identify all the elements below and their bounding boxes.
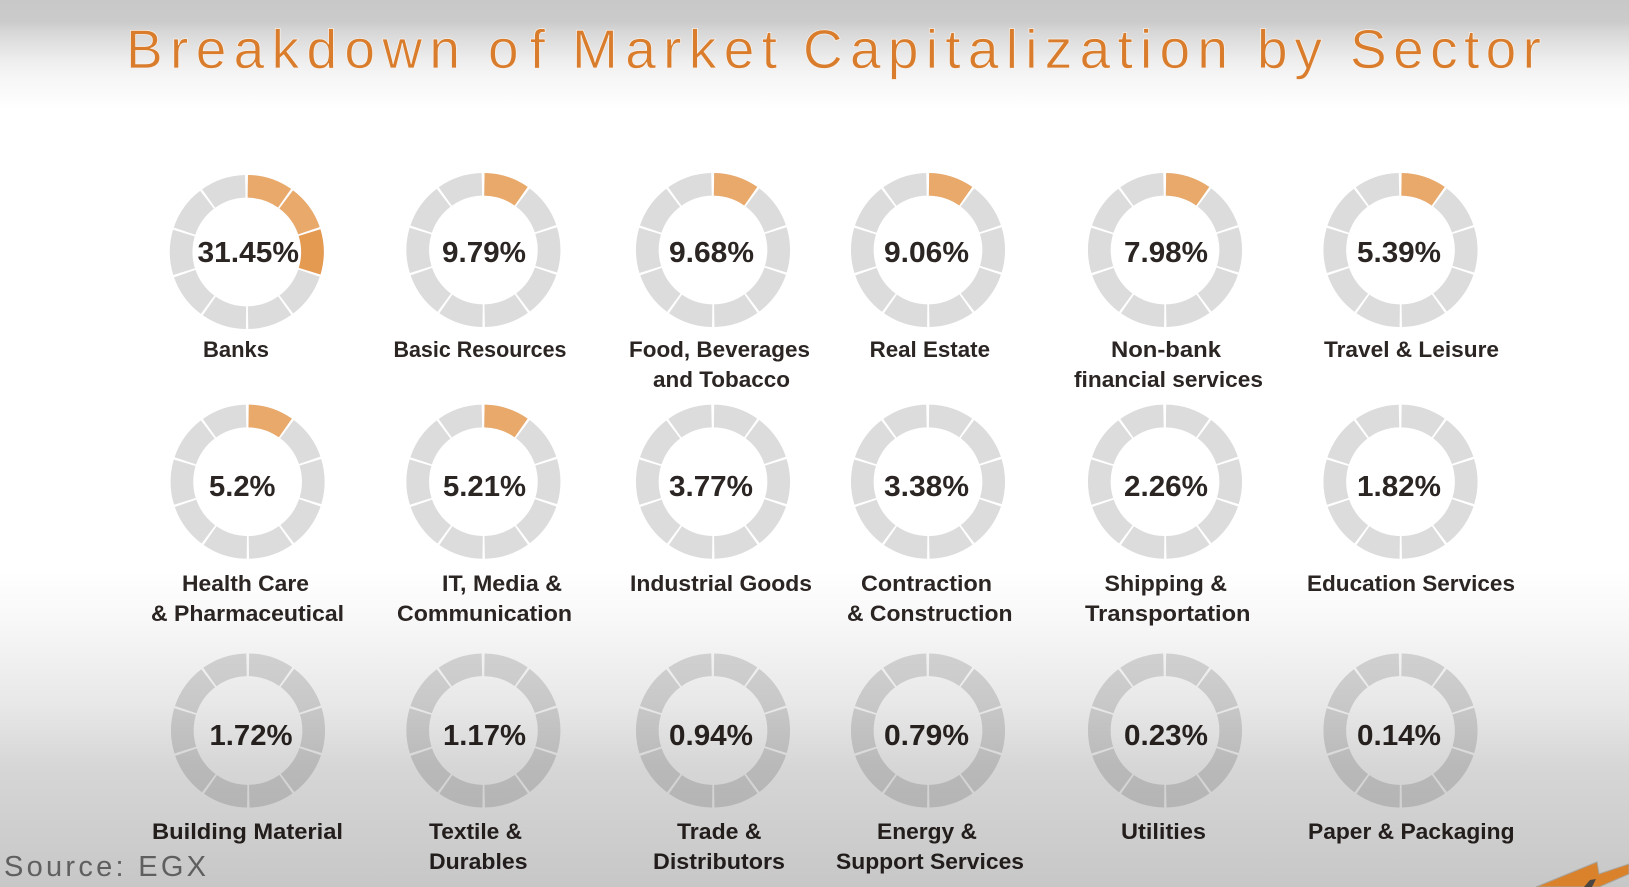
sector: Building Material [152, 665, 343, 844]
label: Basic Resources: Basic Resources [394, 337, 566, 362]
donut: Shipping & Transportation [1099, 416, 1231, 547]
value: 1.17%: 1.17% [443, 720, 526, 752]
label: Trade & Distributors: Trade & [677, 819, 762, 844]
sector: Paper & Packaging [1308, 665, 1514, 844]
label: Shipping & Transportation: Transportation [1085, 601, 1250, 626]
label: Textile & Durables: Durables [429, 849, 528, 874]
label: Education Services: Education Services [1307, 571, 1515, 596]
label: Non-bank financial services: Non-bank [1111, 337, 1222, 362]
label: Energy & Support Services: Support Services [836, 849, 1024, 874]
label: Paper & Packaging: Paper & Packaging [1308, 819, 1514, 844]
sector: Food, Beverages and Tobacco [629, 184, 810, 392]
sector: Utilities [1099, 665, 1231, 844]
donut: Contraction & Construction [862, 416, 994, 547]
sector: Real Estate [862, 184, 994, 362]
title: Market [572, 18, 777, 80]
label: Non-bank financial services [1074, 337, 1263, 392]
donut: Industrial Goods [647, 416, 779, 547]
sector: Travel & Leisure [1324, 184, 1499, 362]
label: Building Material: Building Material [152, 819, 343, 844]
sector: Non-bank financial services [1074, 184, 1263, 392]
sector: Energy & Support Services [836, 665, 1024, 874]
label: Travel & Leisure: Travel & Leisure [1324, 337, 1499, 362]
sector: Education Services [1307, 416, 1515, 596]
label: Utilities: Utilities [1121, 819, 1206, 844]
donut: Paper & Packaging [1335, 665, 1466, 796]
donut: Education Services [1335, 416, 1466, 547]
title: Sector [1350, 18, 1541, 80]
label: Contraction & Construction: & Construction [847, 601, 1012, 626]
value: 5.39%: 5.39% [1357, 237, 1441, 269]
value: 0.23%: 0.23% [1124, 720, 1208, 752]
donut: Food, Beverages and Tobacco [647, 184, 779, 316]
donut: Banks [181, 186, 312, 318]
value: 0.79%: 0.79% [884, 720, 969, 752]
label: IT, Media & Communication: IT, Media & [442, 571, 562, 596]
title: by [1257, 18, 1322, 80]
sector: IT, Media & Communication [397, 416, 572, 626]
label: IT, Media & Communication [397, 571, 572, 626]
donut: Building Material [182, 665, 314, 796]
donut: Energy & Support Services [862, 665, 994, 796]
label: Industrial Goods: Industrial Goods [630, 571, 812, 596]
value: 7.98%: 7.98% [1124, 237, 1208, 269]
title: of [488, 18, 546, 80]
value: 0.94%: 0.94% [669, 720, 753, 752]
donut: Real Estate [862, 184, 994, 316]
sector: Industrial Goods [630, 416, 812, 596]
label: Energy & Support Services [836, 819, 1024, 874]
label: IT, Media & Communication: Communication [397, 601, 572, 626]
value: 3.77%: 3.77% [669, 471, 753, 503]
sector: Basic Resources [394, 184, 566, 362]
donut: Travel & Leisure [1335, 184, 1466, 316]
value: 9.68%: 9.68% [669, 237, 754, 269]
value: 2.26%: 2.26% [1124, 471, 1208, 503]
value: 9.79%: 9.79% [442, 237, 526, 269]
value: 9.06%: 9.06% [884, 237, 969, 269]
sector: Banks [181, 186, 312, 362]
label: Contraction & Construction: Contraction [861, 571, 992, 596]
title: Breakdown [126, 18, 460, 80]
label: Contraction & Construction [847, 571, 1012, 626]
label: Energy & Support Services: Energy & [877, 819, 977, 844]
label: Health Care & Pharmaceutical [151, 571, 344, 626]
label: Trade & Distributors: Distributors [653, 849, 785, 874]
sector: Textile & Durables [418, 665, 549, 874]
sector: Contraction & Construction [847, 416, 1012, 626]
donut: Textile & Durables [418, 665, 549, 796]
label: Health Care & Pharmaceutical: & Pharmaceutical [151, 601, 344, 626]
value: 3.38%: 3.38% [884, 471, 969, 503]
donut: Trade & Distributors [647, 665, 779, 796]
bottom shadow gradient [0, 570, 1629, 887]
donut: Health Care & Pharmaceutical [182, 416, 313, 547]
source note: Source: EGX [4, 851, 206, 883]
label: Trade & Distributors [653, 819, 785, 874]
sector: Health Care & Pharmaceutical [151, 416, 344, 626]
title [126, 18, 1541, 80]
label: Food, Beverages and Tobacco: and Tobacco [653, 367, 790, 392]
sector: Shipping & Transportation [1085, 416, 1250, 626]
label: Banks: Banks [203, 337, 269, 362]
donut: Basic Resources [418, 184, 549, 316]
label: Health Care & Pharmaceutical: Health Care [182, 571, 309, 596]
value: 5.2%: 5.2% [209, 471, 276, 503]
value: 1.72%: 1.72% [210, 720, 292, 752]
label: Shipping & Transportation [1085, 571, 1250, 626]
sector: Trade & Distributors [647, 665, 785, 874]
label: Shipping & Transportation: Shipping & [1104, 571, 1227, 596]
label: Food, Beverages and Tobacco: Food, Beverages [629, 337, 810, 362]
value: 0.14%: 0.14% [1357, 720, 1441, 752]
value: 5.21%: 5.21% [443, 471, 526, 503]
label: Food, Beverages and Tobacco [629, 337, 810, 392]
donut: Utilities [1099, 665, 1231, 796]
label: Real Estate: Real Estate [870, 337, 990, 362]
value: 31.45%: 31.45% [198, 237, 299, 269]
label: Non-bank financial services: financial services [1074, 367, 1263, 392]
title: Capitalization [803, 18, 1228, 80]
icon: orange logo corner [1536, 862, 1629, 887]
label: Textile & Durables: Textile & [429, 819, 522, 844]
label: Textile & Durables [429, 819, 528, 874]
value: 1.82%: 1.82% [1357, 471, 1441, 503]
donut: Non-bank financial services [1099, 184, 1231, 316]
donut: IT, Media & Communication [418, 416, 549, 547]
